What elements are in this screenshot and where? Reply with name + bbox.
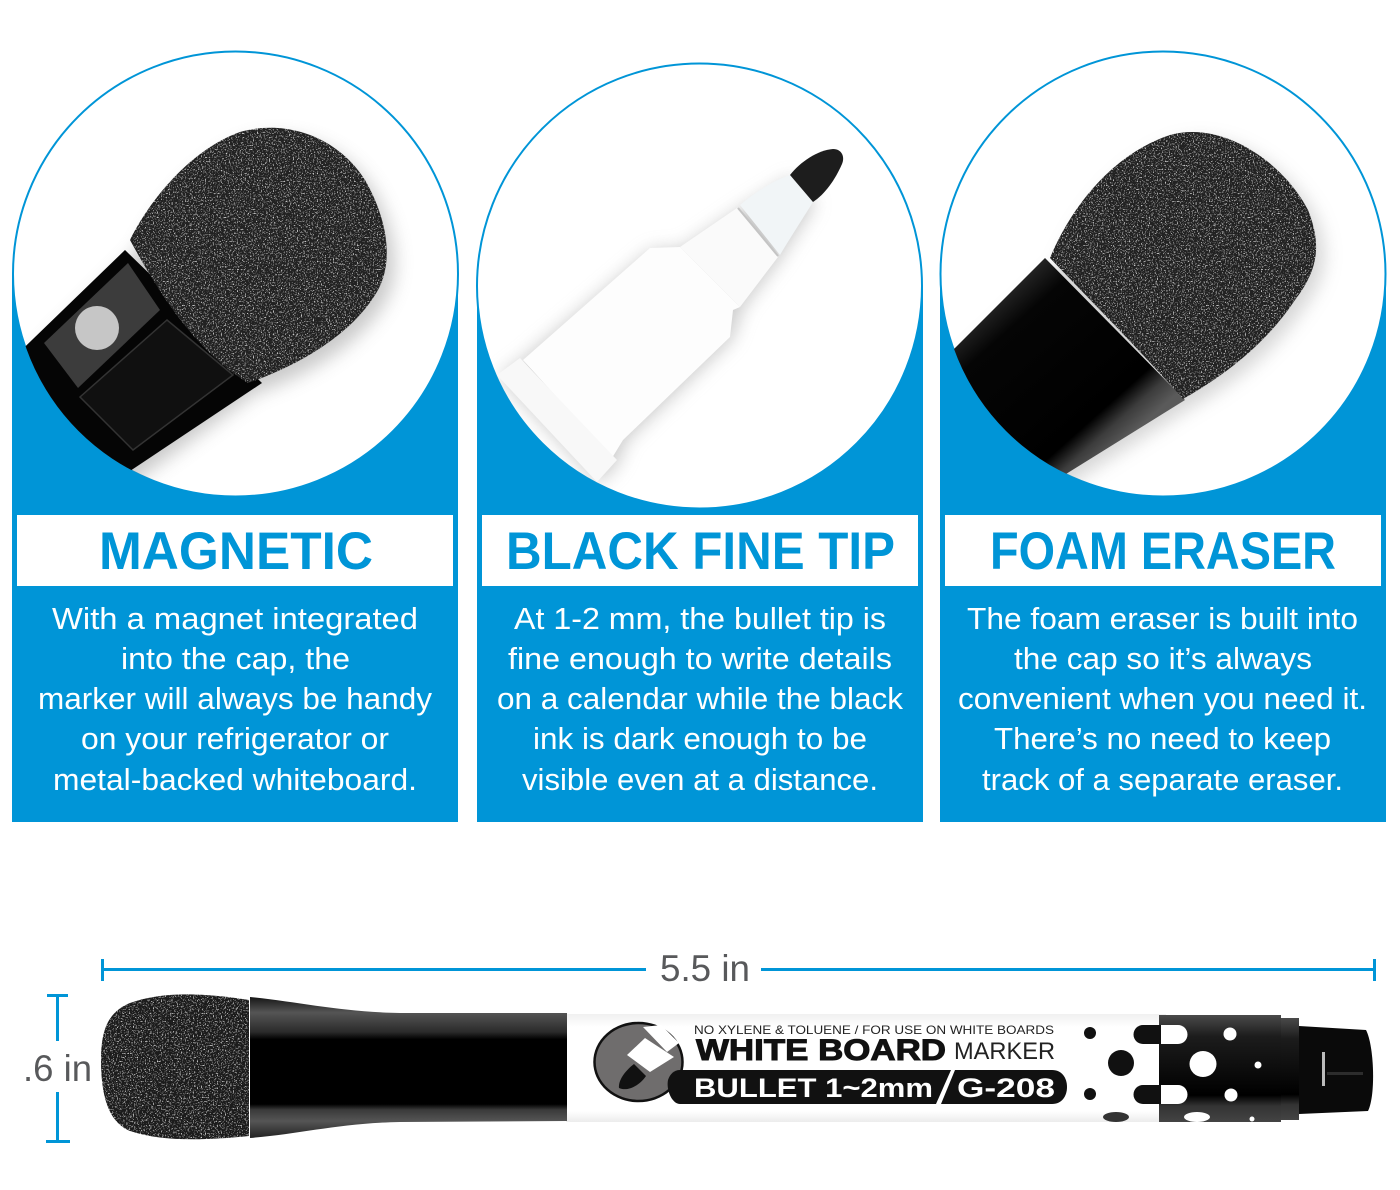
photo circle: magnetic cap (0, 52, 458, 501)
panel: foam eraser (900, 52, 1386, 822)
description: magnetic: into the cap, the (121, 641, 350, 676)
panel: magnetic (0, 52, 458, 822)
heading bar: foam eraser: FOAM ERASER (990, 522, 1336, 581)
photo circle: fine tip (477, 64, 922, 508)
marker body: black cap (250, 997, 567, 1138)
marker photo (101, 994, 1373, 1139)
printed black pill with model info: BULLET 1~2mm (694, 1073, 933, 1103)
printed black pill with model info: G-208 (957, 1073, 1055, 1103)
dimension: length 5.5 in: 5.5 in (660, 948, 750, 989)
panel background (477, 286, 923, 822)
heading bar: magnetic: MAGNETIC (99, 522, 373, 581)
heading bar: magnetic (17, 515, 453, 586)
description: foam eraser (958, 601, 1367, 797)
photo circle: foam eraser (940, 50, 1386, 496)
description: foam eraser: the cap so it’s always (1014, 641, 1312, 676)
description: black fine tip (497, 601, 904, 797)
printed small caption: NO XYLENE & TOLUENE / FOR USE ON WHITE BOARDS (694, 1023, 1054, 1037)
description: foam eraser: There’s no need to keep (994, 721, 1331, 756)
description: black fine tip: visible even at a distance. (522, 762, 878, 797)
description: magnetic: on your refrigerator or (81, 721, 389, 756)
description: magnetic: marker will always be handy (38, 681, 433, 716)
description: magnetic: With a magnet integrated (52, 601, 418, 636)
description: magnetic (38, 601, 433, 797)
description: magnetic: metal-backed whiteboard. (53, 762, 417, 797)
printed word marker: MARKER (954, 1038, 1055, 1065)
description: foam eraser: track of a separate eraser. (982, 762, 1343, 797)
panel background (940, 274, 1386, 822)
description: black fine tip: fine enough to write details (508, 641, 892, 676)
description: foam eraser: convenient when you need it. (958, 681, 1367, 716)
foam eraser tip (101, 994, 249, 1139)
dimension: diameter .6 in (23, 994, 92, 1143)
printed logo (594, 1023, 682, 1101)
marker barrel: label section (566, 1014, 1166, 1122)
black dotted band (1084, 1015, 1281, 1122)
description: foam eraser: The foam eraser is built into (967, 601, 1358, 636)
marker end collar and plug (1281, 1018, 1373, 1120)
printed title: WHITE BOARD (696, 1034, 946, 1067)
dimension: diameter .6 in: .6 in (23, 1048, 92, 1089)
printed black pill with model info (668, 1070, 1067, 1104)
panel background (12, 274, 458, 822)
description: black fine tip: At 1-2 mm, the bullet tip is (514, 601, 886, 636)
description: black fine tip: on a calendar while the black (497, 681, 904, 716)
heading bar: black fine tip: BLACK FINE TIP (506, 522, 895, 581)
description: black fine tip: ink is dark enough to be (533, 721, 867, 756)
panel: black fine tip (477, 64, 923, 822)
dimension: length 5.5 in (101, 948, 1376, 989)
